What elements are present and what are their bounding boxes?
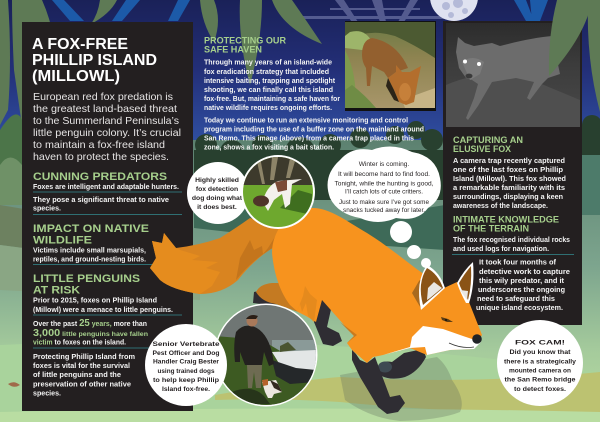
callout: thought bubble: Winter is coming. bbox=[359, 161, 409, 168]
callout: fox cam: the San Remo bridge bbox=[504, 376, 576, 384]
title: PHILLIP ISLAND bbox=[32, 52, 157, 69]
section: impact on native wildlife bbox=[33, 223, 153, 265]
text block: protecting our safe haven: Today we continue to run an extensive monitoring and control bbox=[204, 116, 408, 124]
callout: thought bubble: snacks tucked away for later. bbox=[343, 207, 425, 214]
callout: officer bubble: Pest Officer and Dog bbox=[152, 350, 220, 357]
callout: thought bubble: It will become hard to find food. bbox=[338, 171, 430, 178]
intro text: the greatest land-based threat bbox=[33, 104, 177, 115]
callout: fox cam bbox=[497, 320, 583, 406]
callout: officer bubble: Handler Craig Bester bbox=[153, 358, 219, 366]
leaf over photo bbox=[549, 0, 592, 76]
text block: protecting our safe haven bbox=[204, 36, 424, 152]
callout: officer bubble: Island fox-free. bbox=[162, 386, 210, 393]
text block: protecting our safe haven: zone, shows a fox visiting a bait station. bbox=[204, 142, 334, 152]
text block: protecting our safe haven: San Remo. This image (above) from a camera trap placed in this bbox=[204, 134, 414, 142]
section: cunning predators: They pose a significant threat to native bbox=[33, 195, 169, 204]
section: capturing an elusive fox bbox=[453, 135, 566, 210]
section: little penguins at risk: foxes is vital for the survival bbox=[33, 361, 130, 370]
section: capturing an elusive fox: awareness of the landscape. bbox=[453, 201, 548, 210]
title: A FOX-FREE bbox=[32, 36, 128, 53]
near front leg bbox=[352, 350, 405, 414]
callout: officer bubble: using trained dogs bbox=[158, 368, 215, 375]
photo: infrared fox bbox=[446, 23, 580, 127]
callout: thought bubble: Tonight, while the hunting is good, bbox=[334, 180, 434, 188]
text block: protecting our safe haven: fox-free. But, maintaining a safe haven for bbox=[204, 94, 340, 103]
section: little penguins at risk: species. bbox=[33, 388, 61, 398]
left ear bbox=[419, 265, 445, 310]
section: capturing an elusive fox: one of the last foxes on Phillip bbox=[453, 165, 564, 174]
section: capturing an elusive fox: ELUSIVE FOX bbox=[453, 144, 511, 154]
section: little penguins at risk: Prior to 2015, foxes on Phillip Island bbox=[33, 296, 157, 304]
callout: thought bubble: Just to make sure I’ve got some bbox=[339, 199, 429, 206]
photo: officer and dog bbox=[214, 304, 318, 406]
text block: protecting our safe haven: fox eradication strategy that included bbox=[204, 67, 329, 76]
photo: detection dog bbox=[240, 155, 316, 231]
section: cunning predators bbox=[33, 171, 182, 215]
callout: fox cam: mounted camera on bbox=[509, 368, 571, 374]
callout: officer bubble: Senior Vertebrate bbox=[152, 341, 220, 348]
section: intimate knowledge: It took four months of bbox=[479, 258, 557, 266]
section: little penguins at risk: Over the past 25 years, more than bbox=[33, 318, 147, 329]
intro text: to maintain a fox-free island bbox=[33, 140, 165, 151]
section: intimate knowledge: The fox recognised individual rocks bbox=[453, 235, 570, 244]
callout: thought bubble bbox=[328, 146, 441, 268]
callout: dog bubble bbox=[187, 162, 249, 224]
section: little penguins at risk: 3,000 little penguins have fallen bbox=[33, 327, 148, 339]
title bbox=[32, 36, 157, 85]
callout: fox cam: there is a strategically bbox=[504, 358, 576, 366]
text block: protecting our safe haven: intensive baiting, trapping and spotlight bbox=[204, 76, 336, 85]
section: capturing an elusive fox: A camera trap recently captured bbox=[453, 156, 565, 165]
far hind leg bbox=[253, 288, 282, 304]
intro text: European red fox predation is bbox=[33, 92, 173, 103]
panel: left text bbox=[22, 22, 193, 411]
section: little penguins at risk: of little penguins and the bbox=[33, 370, 121, 379]
section: intimate knowledge: detective work to capture bbox=[479, 267, 570, 276]
text block: protecting our safe haven: program including the use of a buffer zone on the mainland around bbox=[204, 124, 424, 134]
callout: dog bubble: fox detection bbox=[196, 186, 238, 193]
right ear bbox=[457, 262, 474, 303]
section: little penguins at risk: (Millowl) were a menace to little penguins. bbox=[33, 305, 173, 314]
section: capturing an elusive fox: Island (Millowl). This fox showed bbox=[453, 174, 566, 183]
text block: protecting our safe haven: PROTECTING OUR bbox=[204, 36, 286, 46]
section: intimate knowledge: underscores the ongoing bbox=[478, 285, 565, 294]
photo: camera trap fox at bait station bbox=[345, 21, 436, 111]
intro text bbox=[33, 92, 181, 163]
section: impact on native wildlife: reptiles, and ground-nesting birds. bbox=[33, 254, 146, 264]
section: little penguins at risk: LITTLE PENGUINS bbox=[33, 273, 140, 285]
callout: fox cam: to detect foxes. bbox=[514, 386, 566, 393]
section: little penguins at risk: victim to foxes on the island. bbox=[33, 338, 126, 346]
text block: protecting our safe haven: Through many years of an island-wide bbox=[204, 58, 332, 66]
moon bbox=[430, 0, 478, 21]
callout: dog bubble: dog doing what bbox=[192, 195, 243, 202]
section: capturing an elusive fox: surroundings, displaying a keen bbox=[453, 192, 563, 201]
far front leg bbox=[378, 349, 426, 379]
tail bbox=[150, 218, 280, 294]
intro text: to the Summerland Peninsula’s bbox=[33, 116, 179, 127]
section: cunning predators: Foxes are intelligent and adaptable hunters. bbox=[33, 182, 179, 191]
section: intimate knowledge: unique island ecosystem. bbox=[476, 303, 563, 312]
chest and muzzle bbox=[383, 326, 481, 355]
section: intimate knowledge: need to safeguard this bbox=[477, 294, 555, 303]
section: capturing an elusive fox: CAPTURING AN bbox=[453, 135, 523, 145]
callout: fox cam: FOX CAM! bbox=[515, 340, 565, 346]
section: intimate knowledge: INTIMATE KNOWLEDGE bbox=[453, 214, 559, 224]
section: little penguins at risk: preservation of other native bbox=[33, 380, 131, 388]
fox shadow bbox=[340, 357, 462, 421]
callout: fox cam: Did you know that bbox=[510, 349, 571, 356]
body bbox=[272, 208, 482, 363]
panel: right text bbox=[443, 0, 592, 325]
callout: thought bubble: I’ll catch lots of cute critters. bbox=[345, 188, 423, 196]
title: (MILLOWL) bbox=[32, 68, 120, 85]
callout: dog bubble: it does best. bbox=[197, 204, 237, 211]
section: cunning predators: CUNNING PREDATORS bbox=[33, 171, 167, 183]
text block: protecting our safe haven: SAFE HAVEN bbox=[204, 44, 262, 54]
near hind leg bbox=[314, 298, 342, 346]
section: intimate knowledge: this wily predator, and it bbox=[479, 276, 565, 285]
section: impact on native wildlife: Victims include small marsupials, bbox=[33, 246, 146, 254]
callout: dog bubble: Highly skilled bbox=[195, 177, 239, 184]
section: little penguins at risk: Protecting Phillip Island from bbox=[33, 352, 135, 361]
text block: protecting our safe haven: shooting, we can finally call this island bbox=[204, 85, 333, 94]
illustration: running fox bbox=[150, 208, 482, 414]
section: intimate knowledge: and used logs for navigation. bbox=[453, 244, 549, 253]
section: intimate knowledge bbox=[452, 214, 574, 312]
text block: protecting our safe haven: native wildlife requires ongoing efforts. bbox=[204, 103, 332, 112]
section: little penguins at risk bbox=[33, 273, 182, 398]
intro text: haven to protect the species. bbox=[33, 152, 169, 163]
section: intimate knowledge: OF THE TERRAIN bbox=[453, 224, 529, 234]
section: impact on native wildlife: IMPACT ON NATIVE bbox=[33, 223, 149, 235]
section: capturing an elusive fox: a remarkable familiarity with its bbox=[453, 183, 565, 192]
section: cunning predators: species. bbox=[33, 204, 61, 212]
callout: officer bubble: to help keep Phillip bbox=[153, 377, 219, 384]
section: impact on native wildlife: WILDLIFE bbox=[33, 234, 92, 246]
intro text: little penguin colony. It’s crucial bbox=[33, 128, 181, 139]
callout: officer bubble bbox=[145, 324, 227, 406]
section: little penguins at risk: AT RISK bbox=[33, 284, 80, 296]
